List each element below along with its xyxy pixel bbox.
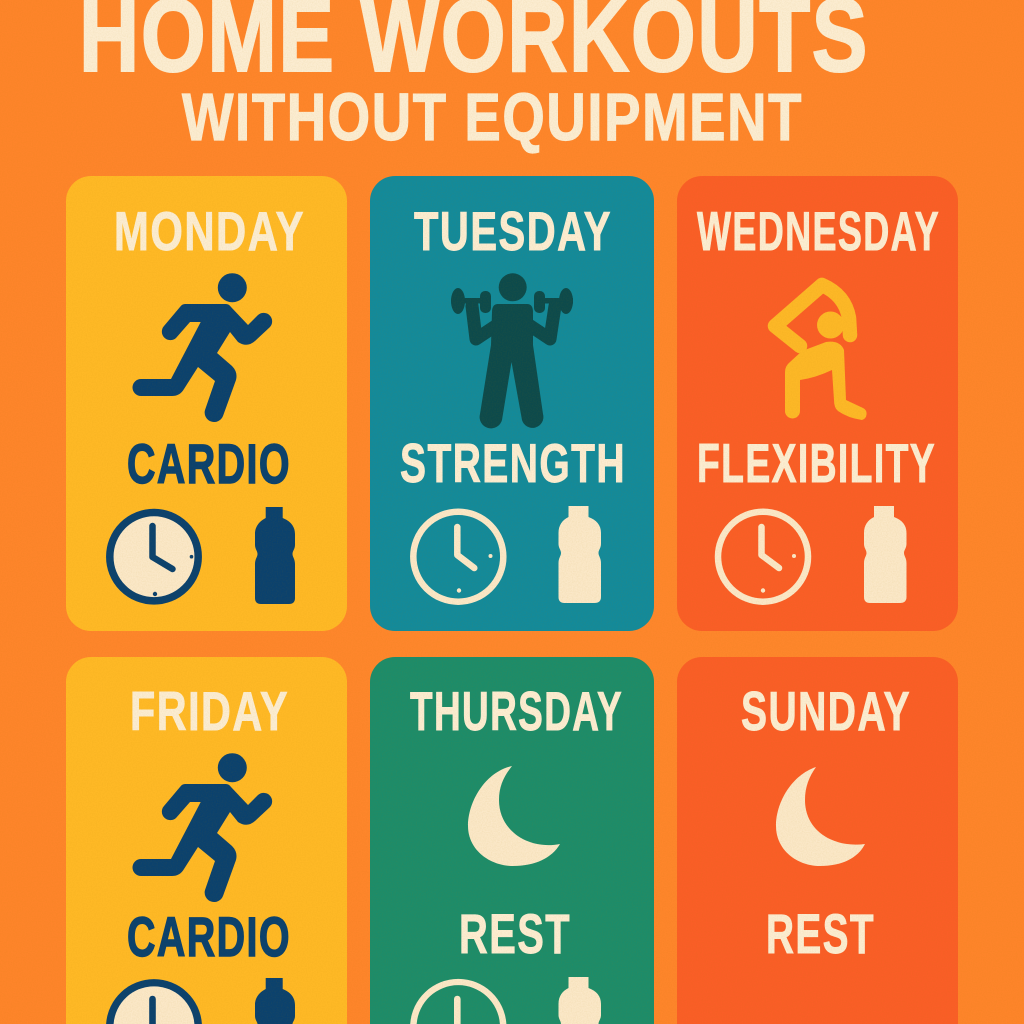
icon: person lifting dumbbells [451,273,573,428]
icon: stretching figure [775,285,867,420]
icon: clock [718,512,808,602]
icon: clock [110,512,198,601]
title [79,0,869,155]
label: cardio: CARDIO [127,905,291,968]
icon: water bottle [255,978,295,1024]
heading: tuesday: TUESDAY [414,200,612,262]
icon: clock [413,512,503,602]
icon: moon [468,766,560,866]
panel: wednesday [677,176,958,631]
icon: moon [776,767,865,866]
heading: monday: MONDAY [114,200,305,262]
subtitle: without equipment: WITHOUT EQUIPMENT [182,80,803,155]
panel: tuesday [370,176,654,631]
panel: friday [66,657,347,1024]
icon: water bottle [255,507,295,604]
icon: clock [410,979,506,1024]
panel: monday [66,176,347,631]
icon: water bottle [864,506,906,603]
heading: sunday: SUNDAY [741,680,911,742]
heading: thursday: THURSDAY [410,680,623,742]
label: rest: REST [459,902,571,965]
label: strength: STRENGTH [400,432,626,494]
label: cardio: CARDIO [127,432,291,495]
icon: runner [132,273,272,422]
icon: water bottle [558,977,601,1024]
panel: thursday [370,657,654,1024]
icon: runner [132,753,272,902]
icon: water bottle [558,506,601,603]
label: rest: REST [766,902,875,965]
heading: friday: FRIDAY [130,680,289,742]
icon: clock [106,979,202,1024]
panel: sunday [677,657,958,1024]
